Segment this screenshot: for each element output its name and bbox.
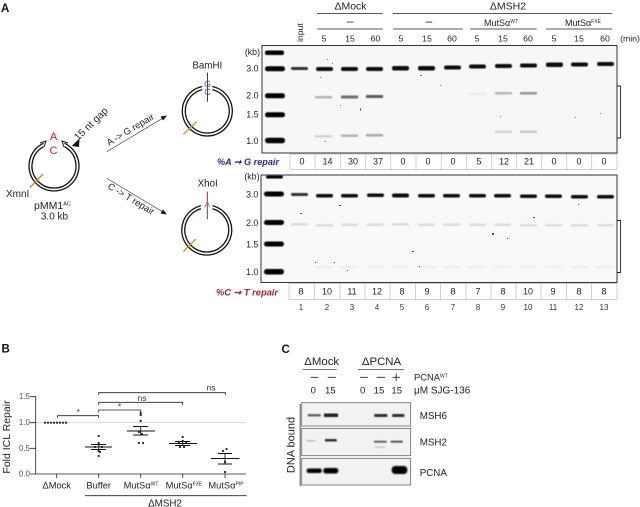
gel 1 size labels — [245, 47, 260, 146]
plasmid with XhoI site: A — [204, 200, 210, 210]
x category labels: MutSα — [166, 481, 193, 491]
lane numbers: 2 — [325, 303, 330, 312]
panel A label: A — [1, 3, 9, 15]
y tick labels: 1.5 — [19, 392, 31, 401]
gel 1 lane header: 15 — [345, 34, 355, 44]
plasmid with BamHI site: G — [204, 79, 211, 89]
table: A to G values: 0 — [425, 156, 431, 166]
DNA bound label: DNA bound — [285, 417, 297, 473]
header: ΔPCNA — [362, 356, 402, 368]
arrow: C to T repair: C -> T repair — [106, 180, 157, 217]
plasmid pMM1 AC: 3.0 kb — [41, 212, 69, 222]
header: 0 — [311, 385, 316, 396]
table: C to T values: 8 — [500, 286, 506, 296]
gel 1 lane header: 60 — [371, 34, 380, 44]
plasmid pMM1 AC: AC — [63, 202, 71, 208]
gel 1 lane header: 5 — [322, 34, 327, 44]
table: C to T values: 9 — [424, 286, 430, 296]
gel 1 lane header: WT — [510, 19, 518, 25]
lane numbers: 11 — [549, 303, 558, 312]
table: A to G values: 0 — [450, 156, 456, 166]
arrow: A to G repair: A -> G repair — [104, 111, 156, 148]
table: C to T values: 9 — [550, 286, 556, 296]
gel 1 lane header — [295, 0, 640, 44]
table: A to G values: 0 — [551, 156, 557, 166]
significance labels: ns — [207, 383, 215, 393]
y tick labels — [19, 392, 31, 479]
gel 1 size labels: 1.0 — [246, 136, 259, 146]
DNA bound label — [285, 404, 300, 486]
speckles — [300, 204, 579, 271]
x category labels: PIP — [236, 482, 244, 488]
ladder — [264, 176, 284, 274]
lane numbers: 1 — [299, 303, 304, 312]
label: percent C to T repair: %C ➞ T repair — [216, 288, 278, 298]
reference line — [36, 422, 246, 424]
header: PCNA — [414, 372, 440, 383]
lane numbers: 4 — [375, 303, 380, 312]
significance labels: ns — [138, 393, 146, 403]
header: 15 — [374, 385, 384, 396]
table: C to T values: 8 — [601, 286, 607, 296]
gel 1 lane header: 15 — [574, 34, 584, 44]
table: C to T values: 12 — [372, 286, 382, 296]
plasmid pMM1 AC: C — [50, 145, 58, 157]
lane numbers: 7 — [451, 303, 456, 312]
3.0 kb bands — [291, 193, 614, 198]
panel C label: C — [282, 344, 290, 356]
gel 1 lane header: – — [426, 14, 433, 28]
lane numbers: 10 — [524, 303, 533, 312]
x category labels: WT — [151, 482, 158, 488]
blot: MSH6: MSH6 — [420, 411, 447, 422]
gel 1 lane header: input — [295, 23, 305, 42]
gel 1: A to G repair — [262, 46, 620, 153]
gel 2: C to T repair — [261, 175, 620, 282]
group label — [85, 495, 247, 497]
table: A to G values: 0 — [576, 156, 582, 166]
panel C: western blot — [285, 356, 471, 486]
blot: MSH2 — [302, 428, 447, 456]
y tick labels: 1.0 — [19, 418, 31, 427]
x category labels — [42, 481, 244, 491]
plasmid pMM1 AC: XmnI — [6, 189, 29, 200]
mean and error bars — [85, 426, 240, 464]
panel B label: B — [2, 344, 10, 356]
table: A to G values: 0 — [400, 156, 406, 166]
table: C to T values: 10 — [523, 286, 533, 296]
gel 1 lane header: 5 — [399, 34, 404, 44]
gel 1 size labels: 3.0 — [246, 64, 259, 74]
gel 1 lane header: 5 — [475, 34, 480, 44]
gel 1 lane header: 15 — [498, 34, 508, 44]
plasmid pMM1 AC: A — [50, 131, 58, 143]
gel 2 size labels — [244, 171, 260, 277]
gel 2 size labels: 1.5 — [246, 240, 258, 250]
bracket — [617, 86, 620, 138]
gel 1 lane header: 60 — [523, 34, 533, 44]
x category labels: MutSα — [124, 481, 151, 491]
gel 1 lane header: (min) — [620, 34, 640, 44]
y tick labels: 0.5 — [19, 444, 31, 453]
gel 1 lane header: MutSα — [565, 18, 591, 28]
ladder — [265, 50, 285, 143]
plasmid with BamHI site: BamHI — [192, 60, 222, 71]
bracket — [617, 220, 620, 272]
x category labels: ΔMock — [42, 481, 71, 491]
blot: MSH2: MSH2 — [420, 438, 447, 449]
plasmid with XhoI site: XhoI — [198, 179, 218, 190]
plasmid with XhoI site — [182, 179, 232, 255]
significance labels: * — [77, 407, 81, 417]
gel 1 lane header: 60 — [600, 34, 610, 44]
table: A to G values: 37 — [373, 156, 383, 166]
header: 15 — [391, 385, 402, 396]
table: C to T values: 8 — [576, 286, 582, 296]
gel 1 lane header: 60 — [447, 34, 457, 44]
repair product bands — [315, 92, 537, 138]
lane numbers: 5 — [400, 303, 405, 312]
axes — [30, 397, 246, 478]
header: 15 — [325, 385, 336, 396]
header: ΔMock — [304, 356, 339, 368]
significance labels: * — [118, 402, 122, 412]
gel 2 size labels: 3.0 — [246, 190, 258, 200]
gel 1 size labels: (kb) — [245, 47, 260, 57]
x category labels: MutSα — [208, 481, 236, 491]
gel 2 size labels: 2.0 — [246, 218, 258, 228]
lane numbers: 9 — [501, 303, 506, 312]
plasmid pMM1 AC: pMM1 — [34, 200, 63, 212]
gel 1 lane header: – — [347, 14, 354, 28]
gel 1 size labels: 1.5 — [246, 109, 259, 119]
plasmid with BamHI site — [182, 60, 232, 136]
header: μM SJG-136 — [414, 385, 471, 396]
blot: MSH6 — [302, 403, 447, 426]
table: A to G values — [290, 154, 617, 170]
lane numbers: 8 — [476, 303, 481, 312]
panel B: scatter chart — [1, 383, 247, 507]
table: C to T values: 8 — [450, 286, 456, 296]
header: 0 — [360, 385, 365, 396]
table: A to G values: 0 — [299, 156, 305, 166]
lane numbers: 3 — [350, 303, 355, 312]
x category labels: FXE — [193, 482, 203, 488]
blot: PCNA: PCNA — [420, 468, 447, 479]
table: A to G values: 0 — [601, 156, 607, 166]
blot: PCNA — [302, 458, 447, 485]
table: A to G values: 5 — [476, 156, 482, 166]
lane numbers — [299, 303, 609, 312]
faint product bands — [291, 223, 614, 268]
lane numbers: 6 — [425, 303, 430, 312]
header: WT — [440, 374, 448, 380]
gel 1 lane header: ΔMSH2 — [490, 0, 526, 12]
table: C to T values: 7 — [475, 286, 481, 296]
data points — [44, 412, 228, 473]
x category labels: Buffer — [86, 481, 111, 491]
table: A to G values: 12 — [499, 156, 509, 166]
gap arrow label: 15 nt gap — [72, 105, 111, 143]
table: A to G values: 21 — [524, 156, 534, 166]
gel 1 lane header: MutSα — [484, 18, 510, 28]
table: C to T values: 8 — [399, 286, 405, 296]
gel 2 size labels: (kb) — [244, 171, 260, 181]
table: C to T values: 10 — [322, 286, 332, 296]
table: A to G values: 14 — [322, 156, 333, 166]
3.0 kb bands — [291, 62, 614, 71]
header — [303, 356, 471, 396]
gel 1 size labels: 2.0 — [246, 91, 259, 101]
gel 1 lane header: FXE — [591, 19, 602, 25]
gel 2 size labels: 1.0 — [246, 267, 258, 277]
table: C to T values — [289, 284, 617, 300]
significance brackets — [58, 393, 226, 418]
label: percent A to G repair: %A ➞ G repair — [217, 157, 279, 167]
table: C to T values: 11 — [347, 286, 357, 296]
significance labels — [77, 383, 215, 417]
table: C to T values: 8 — [298, 286, 304, 296]
plasmid pMM1 AC — [6, 131, 79, 222]
plasmid with BamHI site: C — [204, 87, 211, 97]
gel 1 lane header: 5 — [552, 34, 557, 44]
lane numbers: 13 — [600, 303, 609, 312]
gel 1 lane header: ΔMock — [334, 0, 367, 12]
gel 1 lane header: 15 — [422, 34, 432, 44]
speckles — [320, 59, 601, 142]
panel A: plasmid schematics — [6, 60, 232, 255]
y axis title: Fold ICL Repair — [1, 400, 13, 474]
table: A to G values: 30 — [348, 156, 358, 166]
lane numbers: 12 — [575, 303, 584, 312]
y tick labels: 0.0 — [19, 470, 31, 479]
